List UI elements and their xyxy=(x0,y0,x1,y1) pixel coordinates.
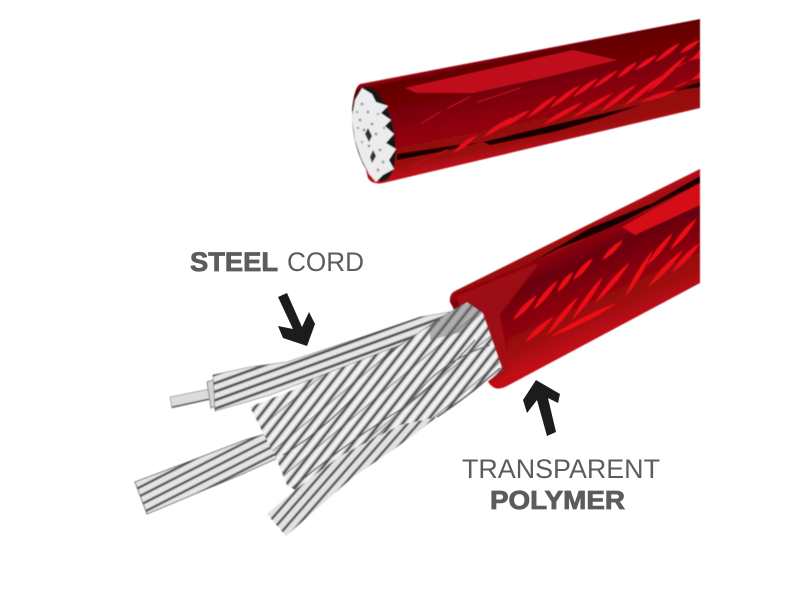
arrow: pointing to steel cord xyxy=(278,293,315,346)
upper cable twisted strand reflections xyxy=(453,40,700,153)
upper cable end face with white wire bundle xyxy=(345,83,403,185)
lower cable dark streak xyxy=(532,176,700,262)
upper cable faint reflections xyxy=(410,88,520,167)
exposed steel cord strands xyxy=(135,302,503,536)
arrow: pointing to transparent polymer xyxy=(523,380,560,436)
upper cable, cut end with polymer jacket xyxy=(345,19,700,185)
label: transparent: TRANSPARENT xyxy=(462,454,660,484)
lower cable polymer jacket xyxy=(450,169,700,389)
lower cable twisted strand reflections xyxy=(513,218,700,342)
label: polymer: POLYMER xyxy=(490,487,625,515)
lower cable lighter region near cut xyxy=(456,262,540,384)
lower cable bright reflection band xyxy=(622,183,700,235)
bottom splayed strand xyxy=(267,417,437,536)
left splayed strand xyxy=(135,432,282,514)
upper cable dark streak xyxy=(397,82,700,160)
label: steel cord: CORD xyxy=(287,247,364,277)
top splayed strand xyxy=(213,312,450,411)
upper cable jacket body xyxy=(352,19,700,183)
lower cable jacket body xyxy=(450,169,700,389)
label: steel cord: STEEL xyxy=(190,247,278,277)
core wire xyxy=(170,379,218,408)
main twisted bundle xyxy=(250,302,503,490)
upper cable reflection band xyxy=(405,50,617,93)
